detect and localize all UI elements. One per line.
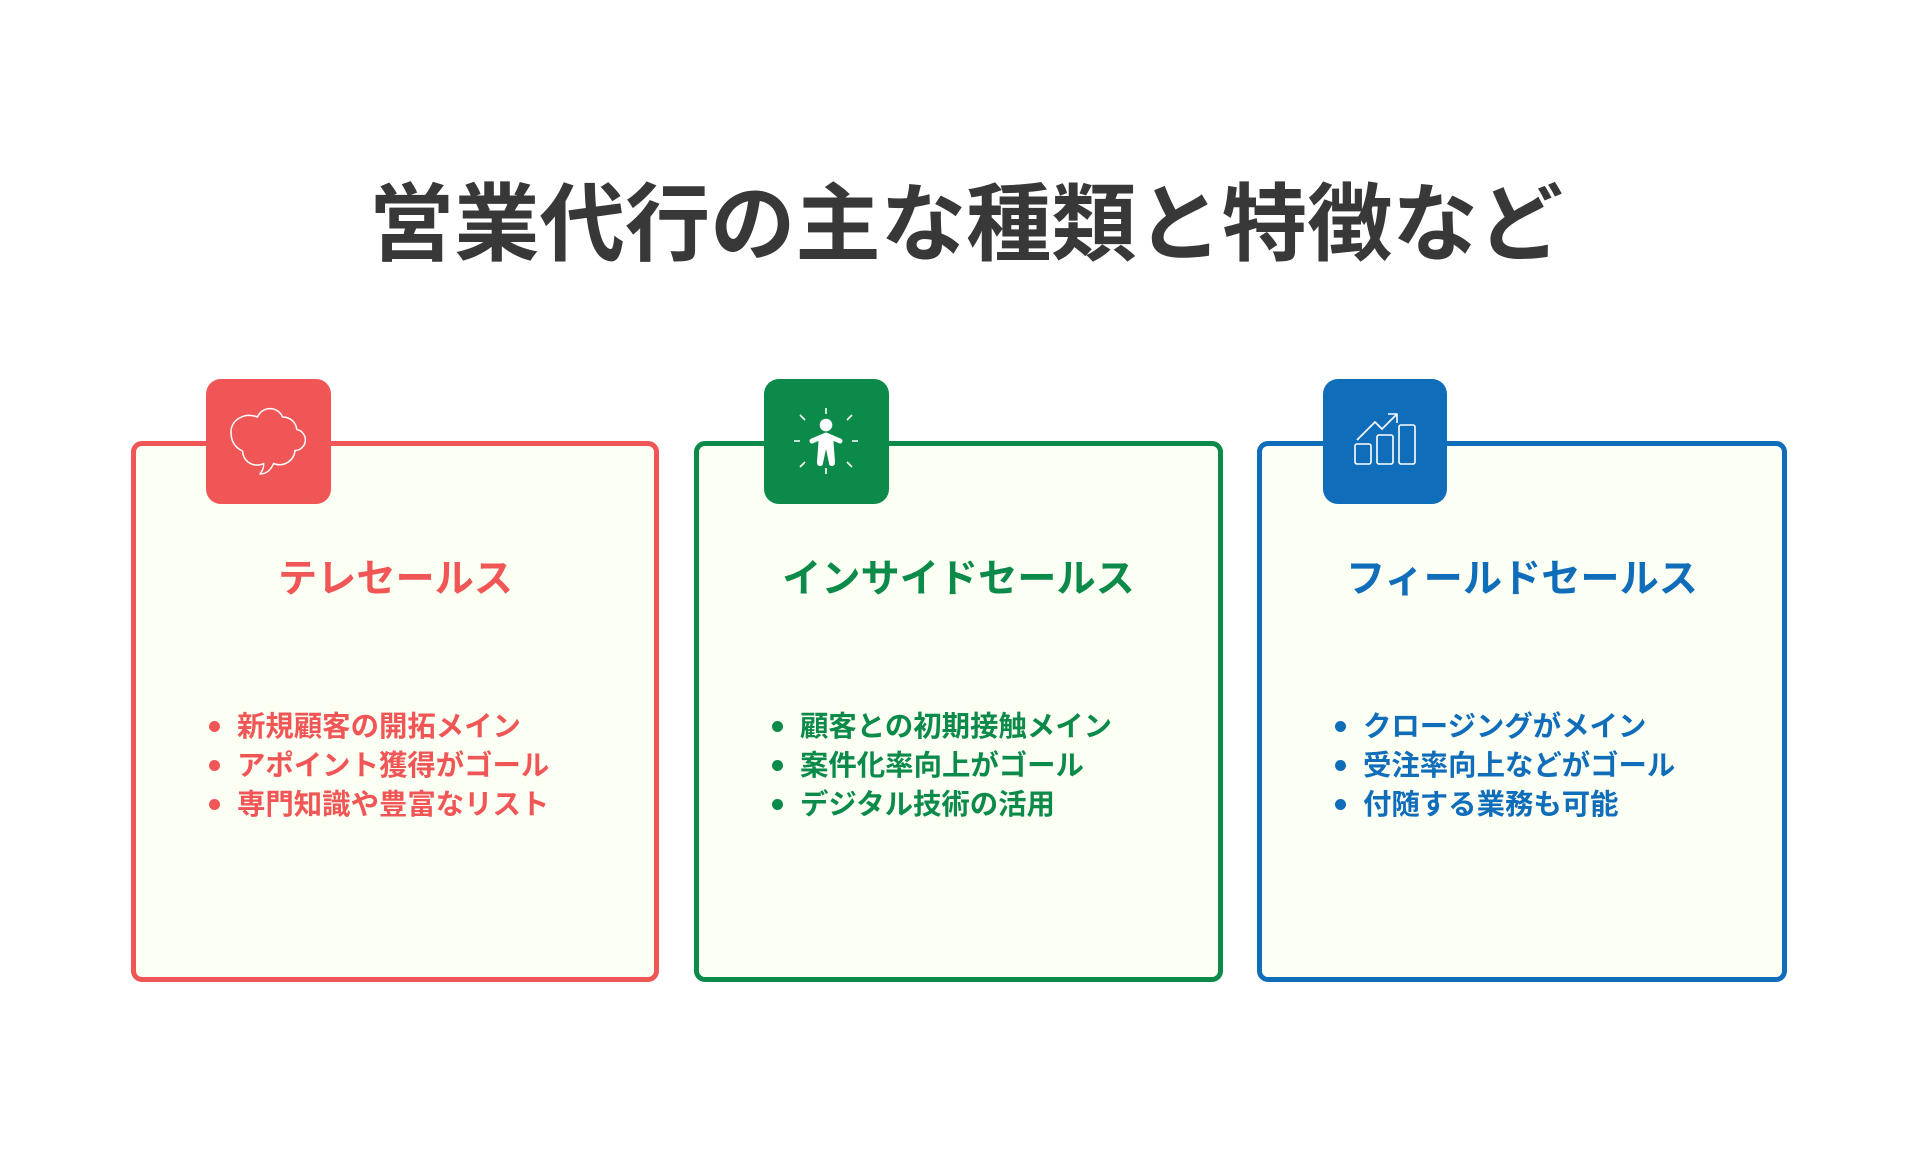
icon: speech cloud [206, 379, 331, 504]
card frame: フィールドセールス [1257, 441, 1787, 982]
card frame: インサイドセールス [694, 441, 1223, 982]
icon: person with rays [764, 379, 889, 504]
list: テレセールス features [209, 711, 549, 821]
card frame: テレセールス [131, 441, 659, 982]
heading: インサイドセールス: インサイドセールス [782, 558, 1135, 601]
heading: フィールドセールス: フィールドセールス [1346, 558, 1698, 601]
list: フィールドセールス features: 受注率向上などがゴール [1363, 750, 1675, 782]
panel: テレセールス [131, 379, 659, 982]
list: テレセールス features: 新規顧客の開拓メイン [237, 711, 521, 743]
list: インサイドセールス features: 顧客との初期接触メイン [800, 711, 1112, 743]
panel: フィールドセールス [1257, 379, 1787, 982]
panel: インサイドセールス [694, 379, 1223, 982]
heading: テレセールス: テレセールス [278, 558, 513, 601]
title: 営業代行の主な種類と特徴など [369, 178, 1563, 273]
list: テレセールス features: アポイント獲得がゴール [237, 750, 549, 782]
list: インサイドセールス features [772, 711, 1112, 821]
list: インサイドセールス features: デジタル技術の活用 [800, 789, 1055, 821]
list: フィールドセールス features: 付随する業務も可能 [1363, 789, 1619, 821]
list: インサイドセールス features: 案件化率向上がゴール [800, 750, 1084, 782]
icon: growth bar chart [1323, 379, 1447, 504]
list: フィールドセールス features [1335, 711, 1675, 821]
list: テレセールス features: 専門知識や豊富なリスト [237, 789, 549, 821]
list: フィールドセールス features: クロージングがメイン [1363, 711, 1646, 743]
